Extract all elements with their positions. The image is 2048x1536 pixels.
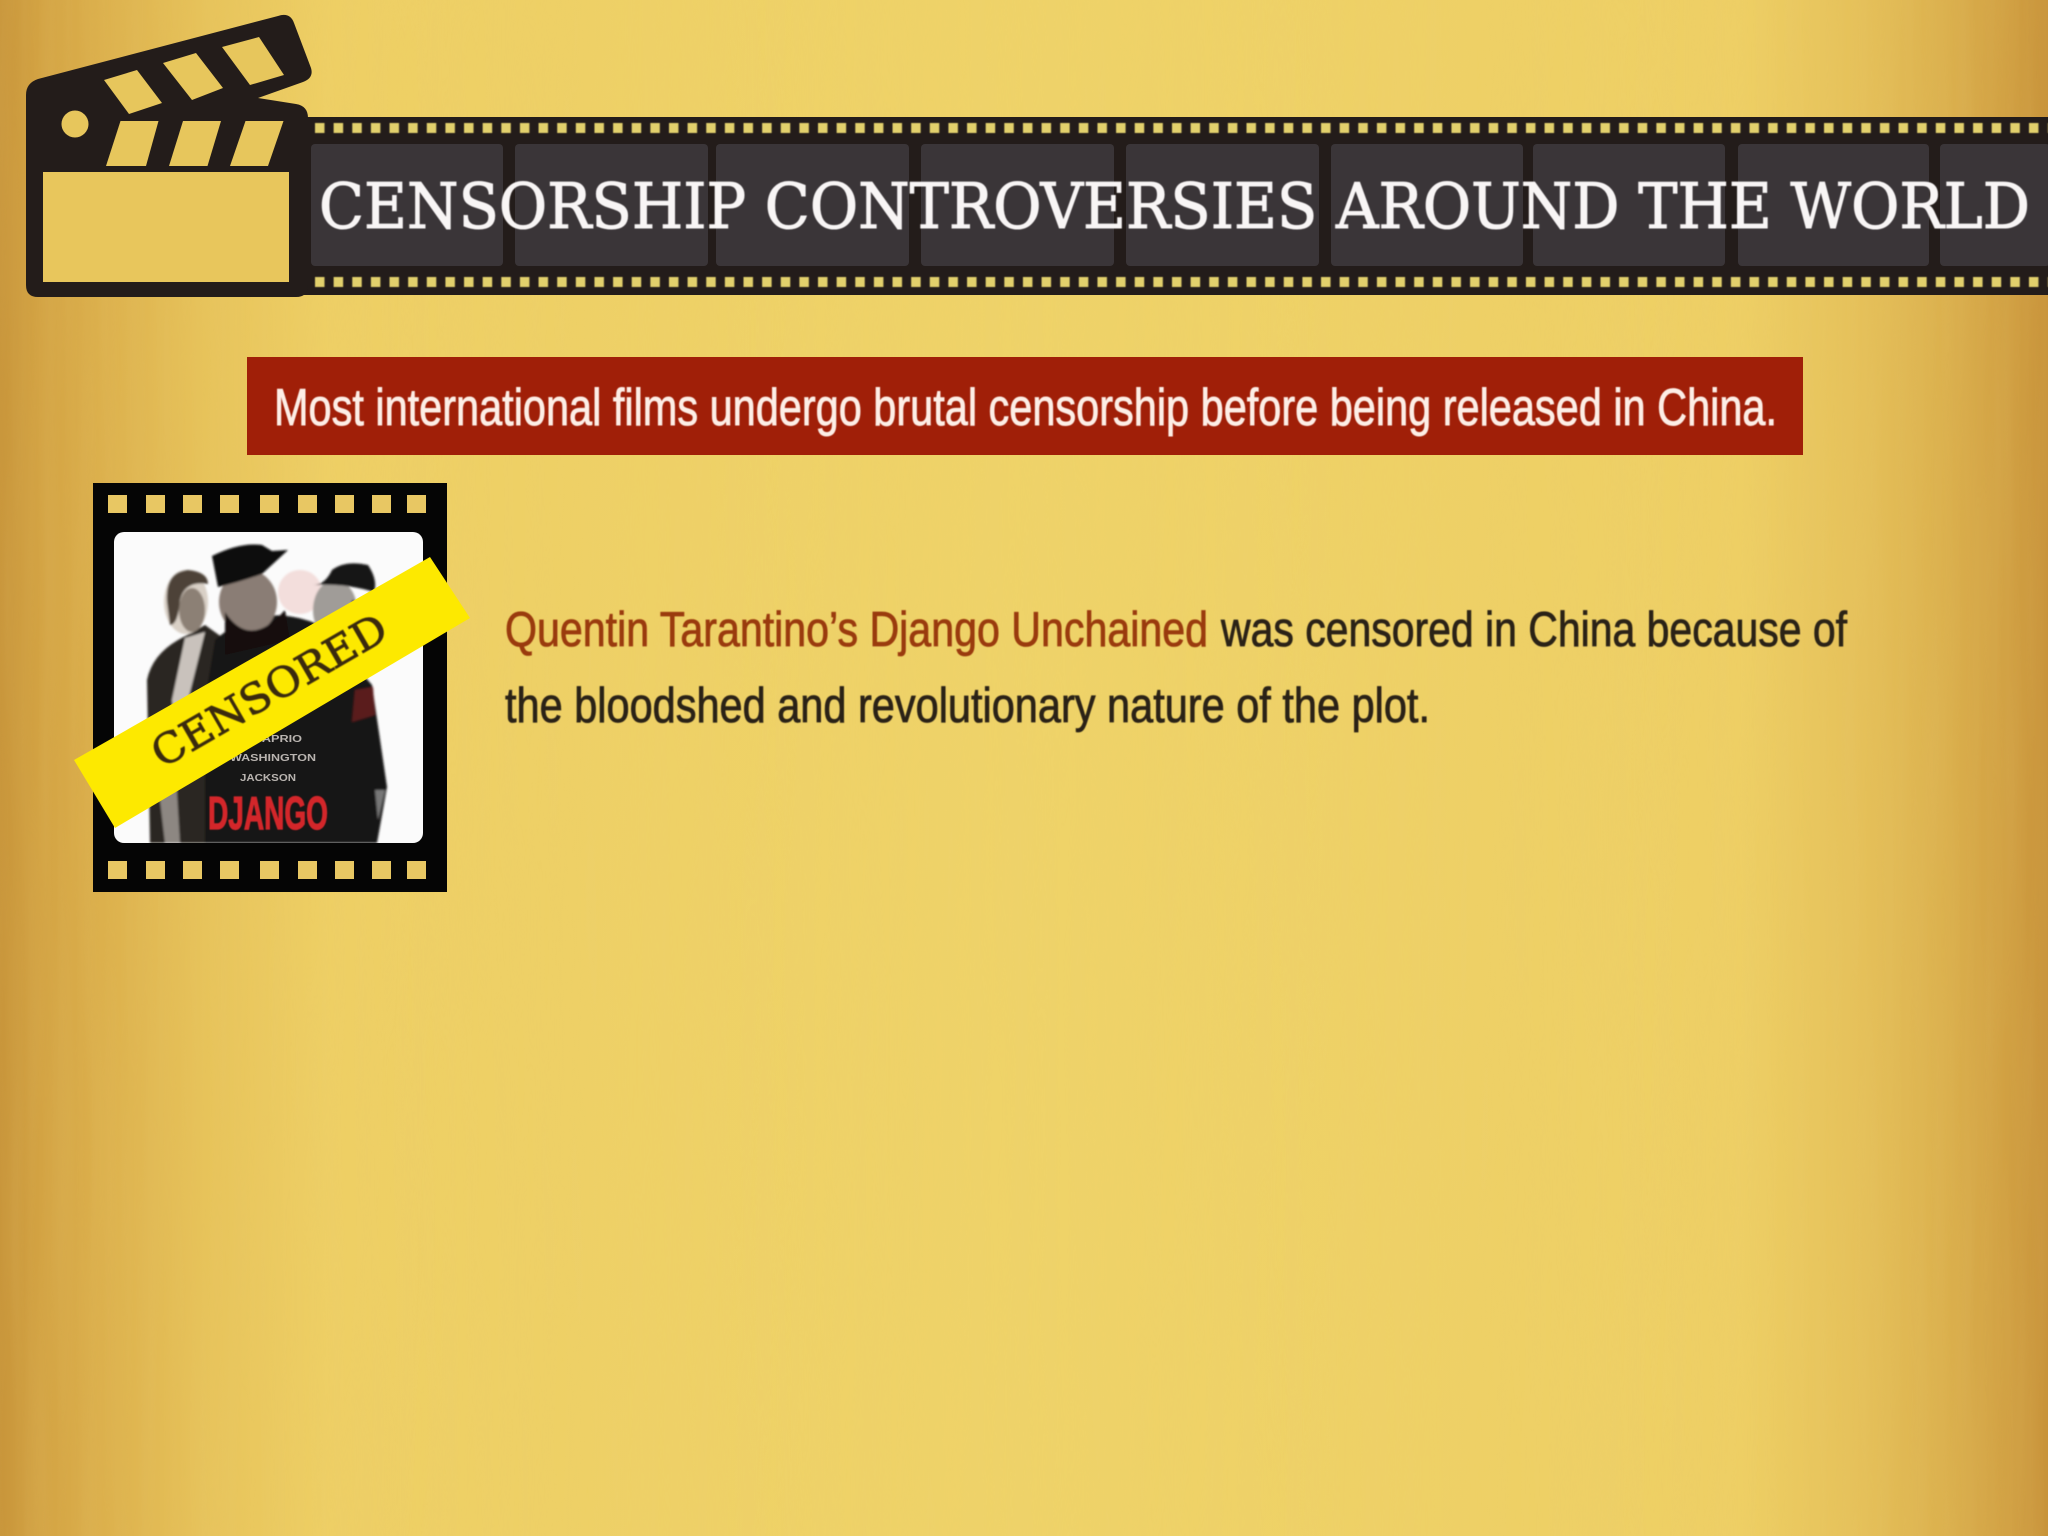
film strip sprocket holes — [310, 118, 2048, 290]
film strip frames — [311, 144, 2048, 266]
poster image — [114, 532, 423, 843]
right man — [312, 583, 357, 624]
header: film strip banner with title — [300, 117, 2048, 295]
censored stamp: CENSORED — [143, 604, 396, 778]
text block: Django Unchained description — [505, 603, 1847, 733]
text block: Django Unchained description: was censored in China because of — [1220, 603, 1847, 657]
left man — [145, 624, 222, 843]
text block: Django Unchained description: the bloodshed and revolutionary nature of the plot. — [505, 679, 1430, 733]
film frame — [93, 483, 447, 892]
text block: Django Unchained description: Quentin Tarantino’s Django Unchained — [505, 603, 1208, 657]
film frame holes — [108, 495, 426, 879]
icon: clapperboard — [26, 15, 312, 297]
poster credits text: WASHINGTON — [230, 753, 316, 764]
film strip body — [300, 117, 2048, 295]
callout: red banner — [247, 357, 1803, 455]
poster credits text: DICAPRIO — [240, 734, 302, 745]
poster: Django Unchained in film frame — [74, 483, 470, 892]
poster credits text: JACKSON — [240, 773, 296, 784]
poster title DJANGO: DJANGO — [208, 787, 328, 839]
poster credits text — [232, 735, 316, 781]
centre man — [205, 615, 387, 843]
censored stamp — [74, 557, 470, 828]
